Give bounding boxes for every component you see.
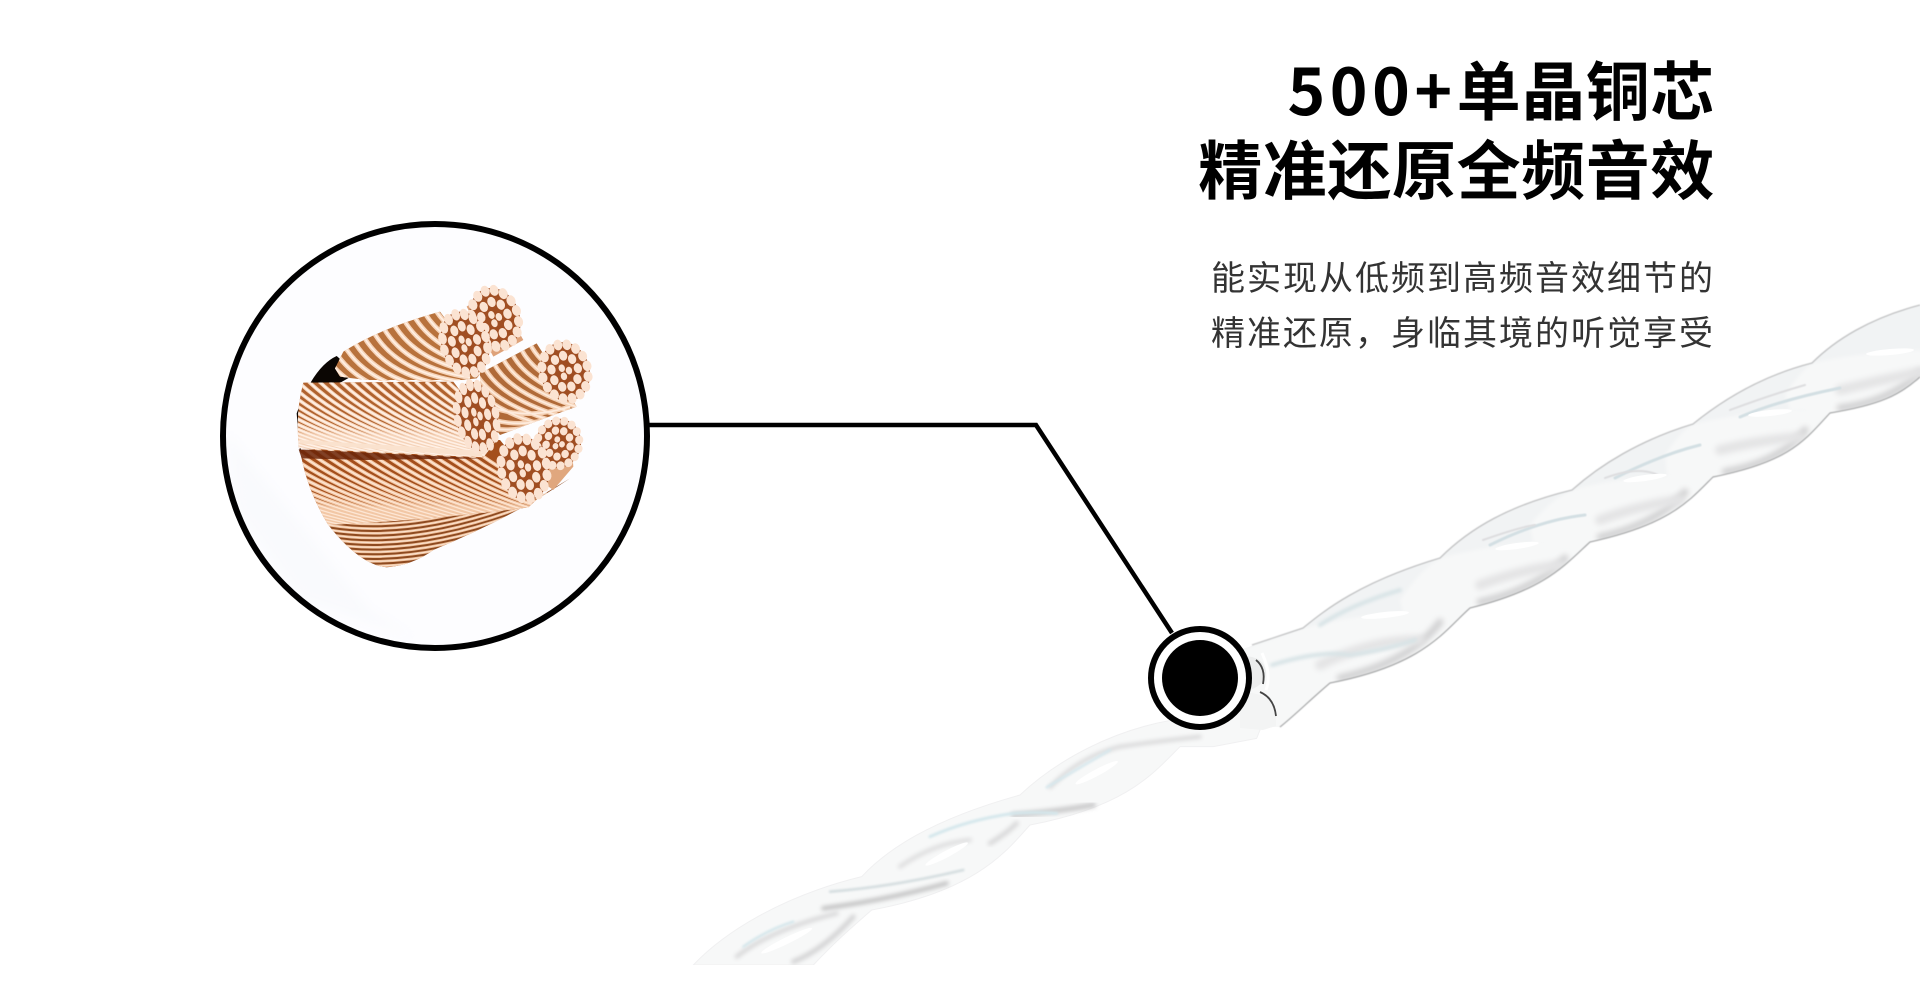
icon: magnified copper strand circle <box>220 221 650 651</box>
title: 精准还原全频音效 <box>1198 121 1715 213</box>
icon: upper twisted white cable <box>1230 290 1920 740</box>
icon: lower twisted white cable <box>680 692 1260 975</box>
circle outline <box>223 224 647 648</box>
title <box>1198 42 1715 213</box>
body text <box>1211 251 1715 355</box>
icon: cut cable tube ends <box>1240 653 1276 730</box>
leader line <box>648 425 1172 633</box>
copper bundle <box>100 277 672 571</box>
body text: 能实现从低频到高频音效细节的 <box>1211 251 1715 300</box>
icon: black locator dot <box>1151 629 1249 727</box>
title: 500+单晶铜芯 <box>1288 42 1715 134</box>
body text: 精准还原，身临其境的听觉享受 <box>1211 306 1715 355</box>
